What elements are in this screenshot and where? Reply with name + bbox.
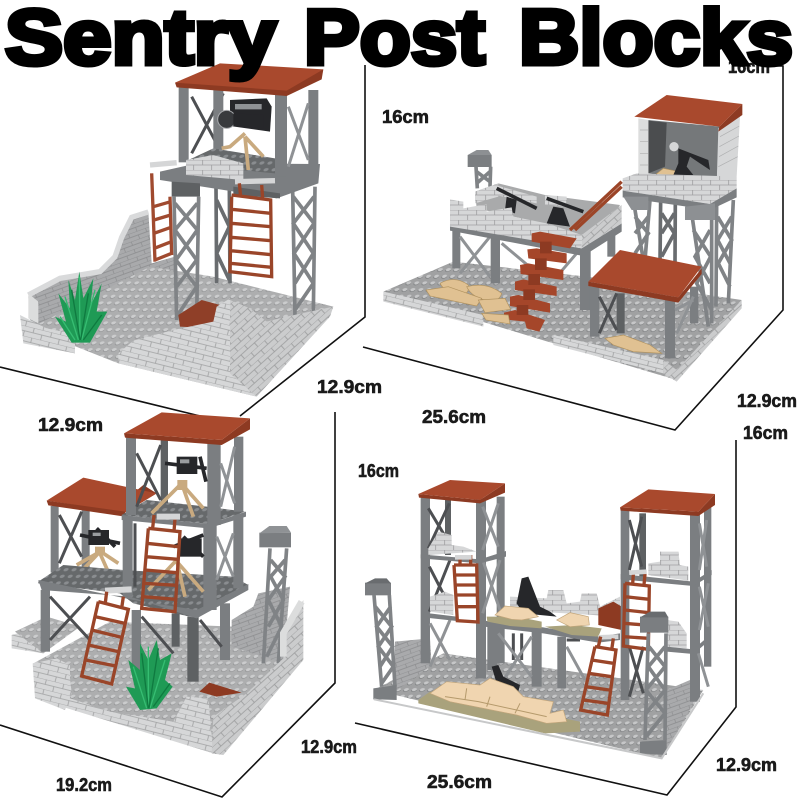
- sandbag bricks on deck: [186, 155, 243, 180]
- lower truss legs: [174, 187, 315, 320]
- front right brick side: [663, 300, 742, 382]
- front left brick wall: [20, 315, 75, 353]
- right roof: [620, 489, 715, 516]
- right lookout post: [640, 612, 668, 755]
- upper frame: [126, 437, 243, 525]
- right tower lower bricks: [667, 620, 687, 648]
- back ladder: [152, 173, 172, 262]
- bridge frames: [487, 627, 585, 688]
- front wall: [35, 697, 213, 753]
- lower frame: [41, 590, 230, 682]
- panel: twin tower long wall post: [365, 480, 715, 758]
- center frame lower: [123, 513, 243, 610]
- label: 12.9cm third model depth: 12.9cm: [301, 737, 357, 757]
- studded floor: [30, 267, 333, 397]
- tower dark interior: [648, 120, 720, 183]
- platform slab: [160, 163, 320, 198]
- fort battlement wall front: [450, 199, 582, 248]
- fort slab: [450, 223, 622, 256]
- fort back crenels: [475, 183, 567, 207]
- tower interior shadow: [648, 121, 667, 173]
- tower slab: [623, 188, 737, 210]
- mortar upper: [517, 577, 557, 617]
- bridge slab: [478, 620, 620, 643]
- left tower lower bricks: [430, 592, 453, 615]
- center gun: [148, 535, 203, 597]
- right wall back: [667, 680, 693, 750]
- left gun on tripod: [72, 528, 120, 583]
- tower gun: [669, 142, 710, 175]
- left wall back: [395, 638, 432, 692]
- front right brick strip: [553, 335, 663, 373]
- top roof: [124, 412, 250, 445]
- right tower: [621, 507, 711, 702]
- tower truss legs: [633, 200, 733, 327]
- fort battlement right: [582, 205, 622, 248]
- dimension lines: top-left set: [0, 65, 365, 416]
- mid deck edge: [122, 512, 246, 528]
- front base edge: [374, 693, 703, 758]
- label: 16cm first model height: 16cm: [382, 107, 429, 127]
- left lookout post: [365, 578, 397, 700]
- wall lit rim: [283, 602, 302, 657]
- rust hatch: [178, 300, 220, 328]
- left roof: [47, 478, 157, 513]
- small shelter posts: [590, 287, 698, 358]
- platform underside blocks: [172, 182, 280, 198]
- back left studs: [15, 617, 80, 653]
- label: 25.6cm fourth model width: 25.6cm: [427, 772, 492, 792]
- tower white side wall: [717, 117, 740, 185]
- panel: wide fort with tower and stairs: [383, 95, 742, 382]
- panel: single tower sentry post: [20, 63, 333, 397]
- fort truss legs: [452, 230, 615, 310]
- label: 12.9cm first model width: 12.9cm: [38, 415, 103, 435]
- front left brick strip: [383, 292, 483, 327]
- tower brick base: [623, 173, 737, 204]
- bush: [126, 640, 173, 710]
- right tower bricks: [648, 552, 688, 581]
- left upper frame: [51, 506, 90, 573]
- back low roof: [125, 485, 157, 508]
- studded floor: [374, 653, 703, 758]
- fort back interior: [475, 183, 620, 235]
- tower left wall: [638, 118, 648, 177]
- right tower lower slab: [667, 635, 710, 654]
- small lookout post: [468, 150, 492, 188]
- upper left ladder: [454, 555, 478, 622]
- left tower slabs: [421, 551, 506, 563]
- rust ramp: [570, 182, 622, 230]
- mid deck: [122, 500, 245, 524]
- dimension lines: top-right set: [363, 66, 783, 430]
- left tower lower slab: [423, 613, 457, 621]
- upper frame back: [192, 93, 223, 153]
- lower ladder: [581, 637, 616, 715]
- centre wall bricks: [510, 590, 620, 617]
- wall top edge: [28, 212, 148, 295]
- gatling gun: [218, 98, 272, 132]
- right tower slab: [621, 570, 712, 586]
- side brick wall: [230, 300, 333, 397]
- tower roof: [634, 95, 742, 132]
- label: 12.9cm second model depth: 12.9cm: [737, 391, 797, 411]
- tower sandbag: [655, 168, 693, 182]
- left sandbags: [426, 280, 511, 324]
- top gun on tripod: [152, 457, 207, 517]
- upper right ladder: [623, 574, 649, 649]
- left tower: [421, 497, 505, 678]
- label: 12.9cm first model depth: 12.9cm: [317, 377, 382, 397]
- front ladder: [82, 592, 128, 684]
- white top clips: [150, 163, 275, 182]
- sandbag pile: [418, 678, 580, 733]
- label: 16cm top clipped: 16cm: [728, 57, 770, 77]
- rust crate: [598, 602, 622, 630]
- front ladder: [230, 183, 272, 277]
- mortar lower: [492, 665, 520, 692]
- panel: two level twin machine gun post: [12, 412, 303, 755]
- ruined back wall: [28, 212, 177, 328]
- upper frame posts: [179, 87, 318, 177]
- back left brick base: [12, 627, 43, 653]
- left roof front edge: [47, 501, 125, 517]
- right ruined back wall: [232, 587, 290, 663]
- label: 12.9cm fourth model depth: 12.9cm: [716, 755, 777, 775]
- tower brick lines: [640, 126, 739, 167]
- center ladder: [142, 515, 180, 612]
- roof: [175, 63, 323, 96]
- dimension lines: bottom-right set: [355, 440, 736, 795]
- label: 16cm third model height: 16cm: [358, 461, 399, 481]
- studded floor: [383, 262, 742, 380]
- right wall: [212, 600, 303, 755]
- small shelter roof: [588, 250, 702, 303]
- front ruined wall: [118, 298, 257, 397]
- lower deck edge: [38, 580, 248, 618]
- label: 19.2cm third model width: 19.2cm: [56, 775, 112, 795]
- dimension lines: bottom-left set: [0, 412, 335, 797]
- front sandbag: [605, 335, 662, 353]
- right lookout post: [259, 526, 291, 663]
- rust hatch: [199, 683, 242, 697]
- label: 16cm fourth model height: 16cm: [743, 423, 788, 443]
- deck white clip: [105, 517, 180, 591]
- lower deck: [38, 565, 248, 618]
- label: 25.6cm second model width: 25.6cm: [422, 407, 486, 427]
- white clips: [455, 557, 647, 637]
- left corner brick wall: [33, 658, 72, 710]
- left wall lit corner: [28, 293, 38, 323]
- bush: [55, 272, 107, 343]
- left roof: [418, 480, 505, 503]
- rust staircase: [504, 232, 577, 332]
- left tower bricks: [428, 532, 477, 555]
- tripod: [222, 133, 263, 170]
- upper deck: [188, 148, 275, 173]
- upper sandbags: [487, 606, 602, 637]
- studded floor: [33, 622, 303, 753]
- fort machine guns: [497, 188, 583, 227]
- tower slab blocks: [623, 197, 715, 220]
